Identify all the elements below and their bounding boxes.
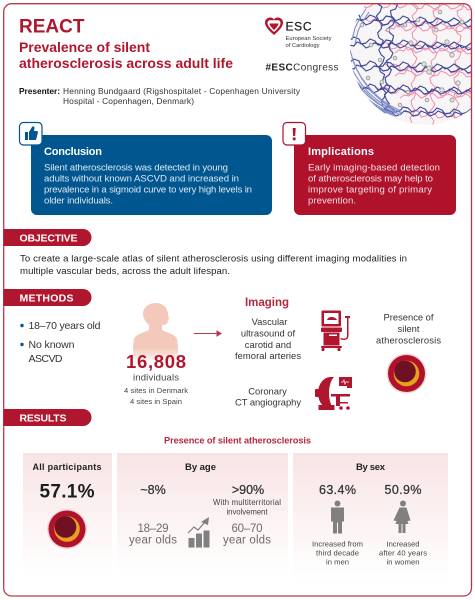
heading: methods: METHODS: [20, 292, 74, 304]
imaging list: ultrasound of: [241, 328, 295, 338]
ESC logo: European Society: [286, 36, 332, 42]
results heading: Presence of silent atherosclerosis: [164, 436, 311, 446]
congress hashtag: #ESCCongress: [266, 62, 338, 74]
panel: by age: 18–29: [138, 523, 168, 535]
panel: by sex: Increased: [386, 540, 420, 548]
panel: by age: year olds: [223, 534, 271, 546]
panel: by sex: 50.9%: [384, 483, 422, 497]
imaging list: femoral arteries: [235, 350, 301, 361]
panel: implications: prevention.: [308, 196, 356, 206]
panel: by sex: 63.4%: [319, 483, 356, 497]
criteria list: [20, 320, 101, 365]
arrow: [194, 331, 221, 336]
heading: results: RESULTS: [20, 412, 66, 424]
panel: conclusion: Silent atherosclerosis was detected in young: [44, 162, 228, 174]
presence text: Presence of: [384, 312, 434, 322]
panel: by age: >90%: [232, 483, 264, 497]
imaging list: Coronary: [248, 386, 287, 396]
panel: by sex: in men: [326, 558, 349, 566]
title: REACT: [19, 16, 85, 38]
panel: by age: involvement: [226, 508, 268, 516]
presenter: Hospital - Copenhagen, Denmark): [63, 96, 194, 106]
individuals label: 4 sites in Denmark: [124, 386, 188, 395]
panel: by sex: third decade: [316, 548, 359, 558]
criteria list: 18–70 years old: [28, 320, 101, 332]
panel: conclusion: adults without known ASCVD and increased in: [44, 174, 239, 184]
imaging list: CT angiography: [235, 396, 301, 408]
individuals label: [124, 372, 188, 406]
presence text: silent: [398, 323, 420, 334]
panel: implications: improve targeting of primary: [308, 184, 432, 196]
panel: all participants: [23, 453, 112, 575]
panel: conclusion: [20, 122, 272, 215]
panel: implications: Implications: [308, 146, 374, 158]
heading: objective: OBJECTIVE: [20, 232, 78, 244]
panel: by age: year olds: [129, 534, 177, 546]
presence text: atherosclerosis: [376, 334, 441, 346]
individuals label: 4 sites in Spain: [130, 397, 182, 406]
panel: implications: of atherosclerosis may help to: [308, 174, 433, 184]
icon: artery cross-section: [47, 509, 87, 549]
icon: CT scanner: [315, 377, 352, 410]
imaging heading: Imaging: [245, 297, 289, 309]
presenter: Presenter:: [19, 86, 60, 96]
imaging list: [235, 316, 301, 408]
panel: conclusion: older individuals.: [44, 196, 113, 206]
presence text: [376, 312, 441, 346]
sample size: 16,808: [126, 351, 186, 372]
panel: conclusion: Conclusion: [44, 146, 102, 158]
icon: person silhouette: [133, 303, 178, 363]
panel: by sex: [293, 453, 448, 580]
panel: by sex: in women: [386, 558, 420, 566]
individuals label: individuals: [133, 372, 179, 384]
icon: thumbs up: [20, 122, 42, 145]
icon: artery cross-section: [386, 354, 426, 394]
panel: by age: With multiterritorial: [213, 498, 281, 507]
ESC logo: ESC: [286, 20, 312, 34]
sphere: vascular network: [350, 4, 471, 125]
heading: results: [4, 409, 92, 426]
icon: ultrasound machine: [321, 310, 350, 351]
panel: by sex: Increased from: [312, 540, 363, 548]
icon: growth chart: [188, 517, 210, 548]
icon: exclamation: [283, 122, 306, 145]
criteria list: No known: [28, 339, 75, 351]
imaging list: Vascular: [252, 316, 287, 327]
panel: by age: ~8%: [140, 483, 166, 497]
panel: by age: [117, 453, 288, 575]
imaging list: carotid and: [245, 339, 291, 350]
ESC logo: of Cardiology: [286, 43, 320, 49]
panel: all participants: 57.1%: [40, 482, 95, 502]
subtitle: Prevalence of silent: [19, 39, 150, 55]
panel: by sex: after 40 years: [379, 548, 427, 558]
objective text: [20, 254, 407, 277]
subtitle line 2: atherosclerosis across adult life: [19, 55, 233, 71]
objective text: To create a large-scale atlas of silent atherosclerosis using different imaging modalities in: [20, 254, 407, 264]
panel: implications: [283, 122, 456, 215]
panel: conclusion: prevalence in a sigmoid curve to very high levels in: [44, 184, 252, 196]
presenter: [19, 86, 301, 106]
heading: objective: [4, 229, 92, 246]
icon: man: [331, 500, 344, 534]
presenter: Henning Bundgaard (Rigshospitalet - Copenhagen University: [63, 86, 301, 96]
criteria list: ASCVD: [28, 353, 63, 365]
heading: methods: [4, 289, 92, 306]
icon: woman: [394, 500, 410, 533]
objective text: multiple vascular beds, across the adult lifespan.: [20, 266, 230, 277]
panel: all participants: All participants: [32, 462, 102, 472]
ESC logo: [265, 18, 332, 49]
panel: by age: 60–70: [232, 523, 262, 535]
panel: by age: By age: [185, 462, 216, 473]
panel: implications: Early imaging-based detection: [308, 162, 440, 174]
panel: by sex: By sex: [356, 462, 386, 473]
